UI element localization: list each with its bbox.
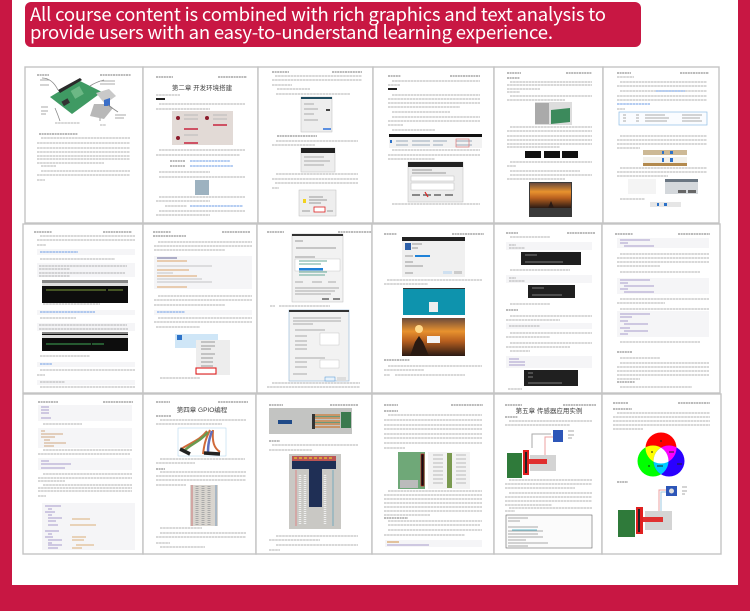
chapter title: 第二章 开发环境搭建 <box>172 83 233 92</box>
page 3: installation dialogs <box>258 67 373 223</box>
wiring diagram <box>618 486 687 537</box>
page 15: GPIO breakout <box>256 394 372 554</box>
image: QR code <box>195 180 209 195</box>
code block long <box>42 503 135 550</box>
heading banner: All course content is combined with rich graphics and text analysis to <box>30 1 606 27</box>
image: network settings <box>628 179 698 194</box>
page 8: configuration with code <box>143 224 257 393</box>
icon: Raspberry Pi board photo <box>40 78 126 121</box>
page 9: display settings dialogs <box>257 224 372 393</box>
terminal screenshot two <box>42 332 128 351</box>
image: taskbar icons <box>643 150 687 166</box>
page 10: remote desktop <box>372 224 494 393</box>
chapter title: 第五章 传感器应用实例 <box>516 406 582 415</box>
page 2: chapter two development environment <box>143 67 258 223</box>
page 5: display connection <box>494 67 603 223</box>
image: dialog one <box>301 97 332 132</box>
page 14: chapter four GPIO programming <box>143 394 256 554</box>
image: ribbon cable photo <box>269 408 352 434</box>
image: boot menu <box>525 151 578 158</box>
teal desktop screenshot <box>403 288 465 315</box>
dialog screenshot two <box>289 310 349 381</box>
page 1: Raspberry Pi introduction <box>25 67 143 223</box>
menu screenshot <box>175 334 230 375</box>
image: rainbow jumper wires <box>178 428 226 456</box>
page 6: software and configuration <box>603 67 719 223</box>
icon row: system tray <box>650 202 681 207</box>
page 11: python basics <box>494 224 602 393</box>
terminal output <box>521 252 581 265</box>
page 13: code listings <box>23 394 143 554</box>
code block <box>385 540 482 547</box>
terminal screenshot one <box>42 280 128 303</box>
heading banner <box>25 1 641 47</box>
image: download options <box>172 111 233 145</box>
image: SD card on Pi <box>535 102 572 125</box>
chart: RGB Venn diagram <box>638 432 684 476</box>
terminal output three <box>524 370 578 386</box>
chapter title: 第四章 GPIO编程 <box>177 405 228 414</box>
image: breadboard <box>190 485 218 526</box>
code screenshot <box>506 515 592 548</box>
image: software table <box>389 134 482 148</box>
image: Pi board and pin table <box>398 452 470 489</box>
code block <box>154 256 252 289</box>
image: dialog two <box>301 148 335 172</box>
page 16: GPIO pin description <box>372 394 494 554</box>
image: T-cobbler on breadboard <box>289 454 341 529</box>
image: monitor with sunset <box>529 182 572 217</box>
page 12: python control flow <box>602 224 720 393</box>
page 4: imaging steps <box>373 67 494 223</box>
wiring diagram <box>507 430 574 478</box>
terminal output two <box>528 285 575 298</box>
dialog screenshot <box>292 234 343 302</box>
page 18: RGB color mixing <box>602 394 721 554</box>
page 17: chapter five sensor examples <box>494 394 602 554</box>
image: writer dialog <box>408 162 463 202</box>
page 7: terminal commands <box>23 224 143 393</box>
code block <box>506 356 592 368</box>
heading banner: provide users with an easy-to-understand learning experience. <box>30 19 553 45</box>
login dialog <box>402 237 465 277</box>
table: pin listing <box>619 112 707 125</box>
sunset desktop screenshot <box>402 318 465 356</box>
image: confirmation dialog <box>299 190 336 216</box>
